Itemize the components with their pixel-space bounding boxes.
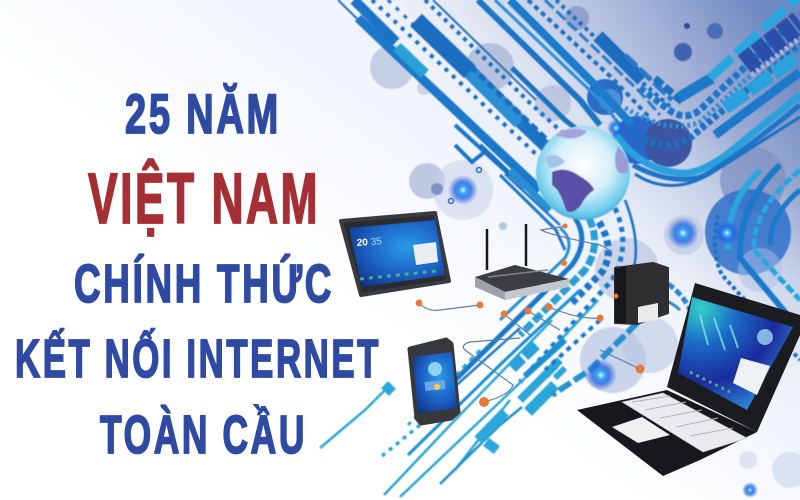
orange connector cables	[416, 224, 644, 407]
icon: storage box	[614, 263, 668, 324]
icon: laptop	[577, 283, 800, 476]
tablet clock: 20 35	[356, 236, 383, 249]
icon: router	[475, 224, 569, 300]
title line: kết nối internet: KẾT NỐI INTERNET	[15, 329, 381, 389]
translucent background circles	[370, 6, 800, 488]
upper circuit bands	[338, 0, 682, 250]
icon: smartphone	[410, 340, 458, 423]
title line: Việt Nam: VIỆT NAM	[88, 159, 320, 239]
lower circuit bands	[320, 200, 650, 497]
laptop keyboard	[622, 393, 747, 452]
glowing nodes	[448, 119, 758, 498]
icon: tablet	[341, 213, 449, 295]
title line: 25 năm: 25 NĂM	[125, 82, 281, 145]
right V-shaped circuit bands	[615, 0, 800, 360]
title	[15, 82, 381, 465]
icon: globe	[536, 126, 630, 220]
title line: toàn cầu: TOÀN CẦU	[100, 405, 307, 465]
title line: chính thức: CHÍNH THỨC	[74, 254, 334, 314]
